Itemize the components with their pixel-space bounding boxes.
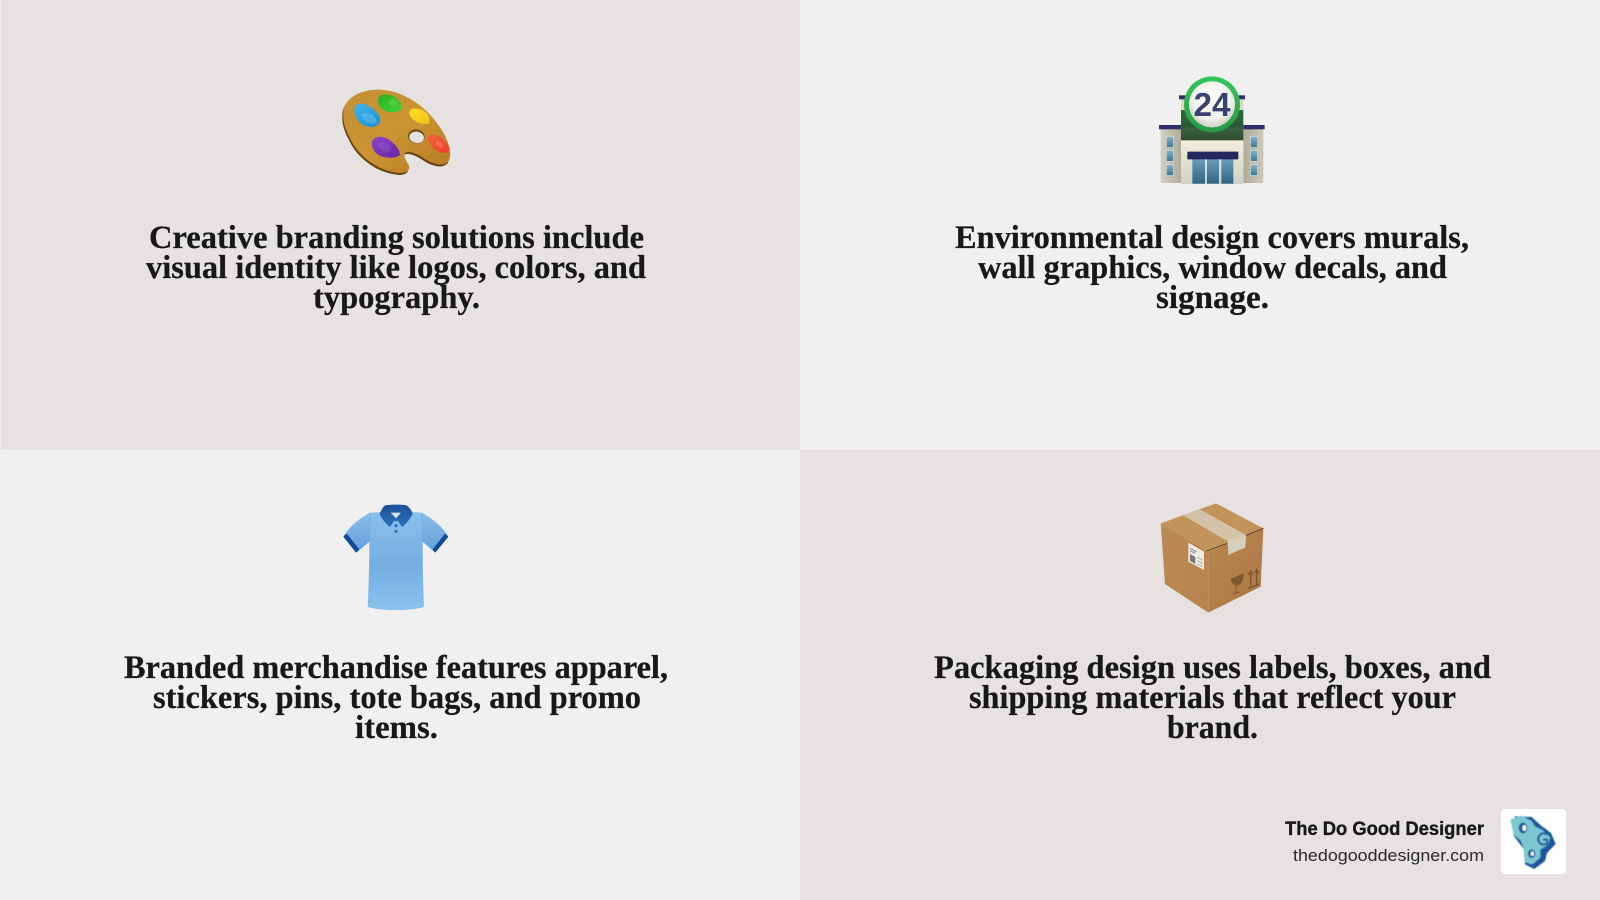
icon: convenience store building: 24 xyxy=(1193,87,1231,124)
heading: creative branding text: visual identity like logos, colors, and xyxy=(146,250,646,286)
heading: creative branding text: typography. xyxy=(313,280,480,316)
heading: packaging design text: shipping materials that reflect your xyxy=(969,680,1456,716)
icon: convenience store building xyxy=(1159,76,1265,184)
heading: packaging design text xyxy=(934,650,1491,746)
brand website: thedogooddesigner.com xyxy=(1293,846,1484,865)
icon: polo shirt xyxy=(343,505,448,610)
panel: branded merchandise xyxy=(0,450,800,900)
heading: environmental design text xyxy=(955,220,1469,316)
brand name: The Do Good Designer xyxy=(1285,819,1485,840)
heading: packaging design text: Packaging design uses labels, boxes, and xyxy=(934,650,1491,686)
panel: creative branding xyxy=(0,0,800,450)
heading: environmental design text: wall graphics, window decals, and xyxy=(978,250,1447,286)
heading: branded merchandise text xyxy=(124,650,668,746)
heading: branded merchandise text: items. xyxy=(355,710,438,746)
icon: artist palette xyxy=(342,90,450,175)
heading: branded merchandise text: Branded merchandise features apparel, xyxy=(124,650,668,686)
heading: packaging design text: brand. xyxy=(1167,710,1258,746)
heading: creative branding text: Creative branding solutions include xyxy=(149,220,644,256)
heading: environmental design text: signage. xyxy=(1156,280,1269,316)
icon: cardboard box xyxy=(1161,503,1263,613)
heading: environmental design text: Environmental design covers murals, xyxy=(955,220,1469,256)
panel: environmental design xyxy=(800,0,1600,450)
heading: creative branding text xyxy=(146,220,646,316)
logo card xyxy=(1501,809,1566,874)
panel: packaging design xyxy=(800,450,1600,900)
heading: branded merchandise text: stickers, pins, tote bags, and promo xyxy=(153,680,641,716)
